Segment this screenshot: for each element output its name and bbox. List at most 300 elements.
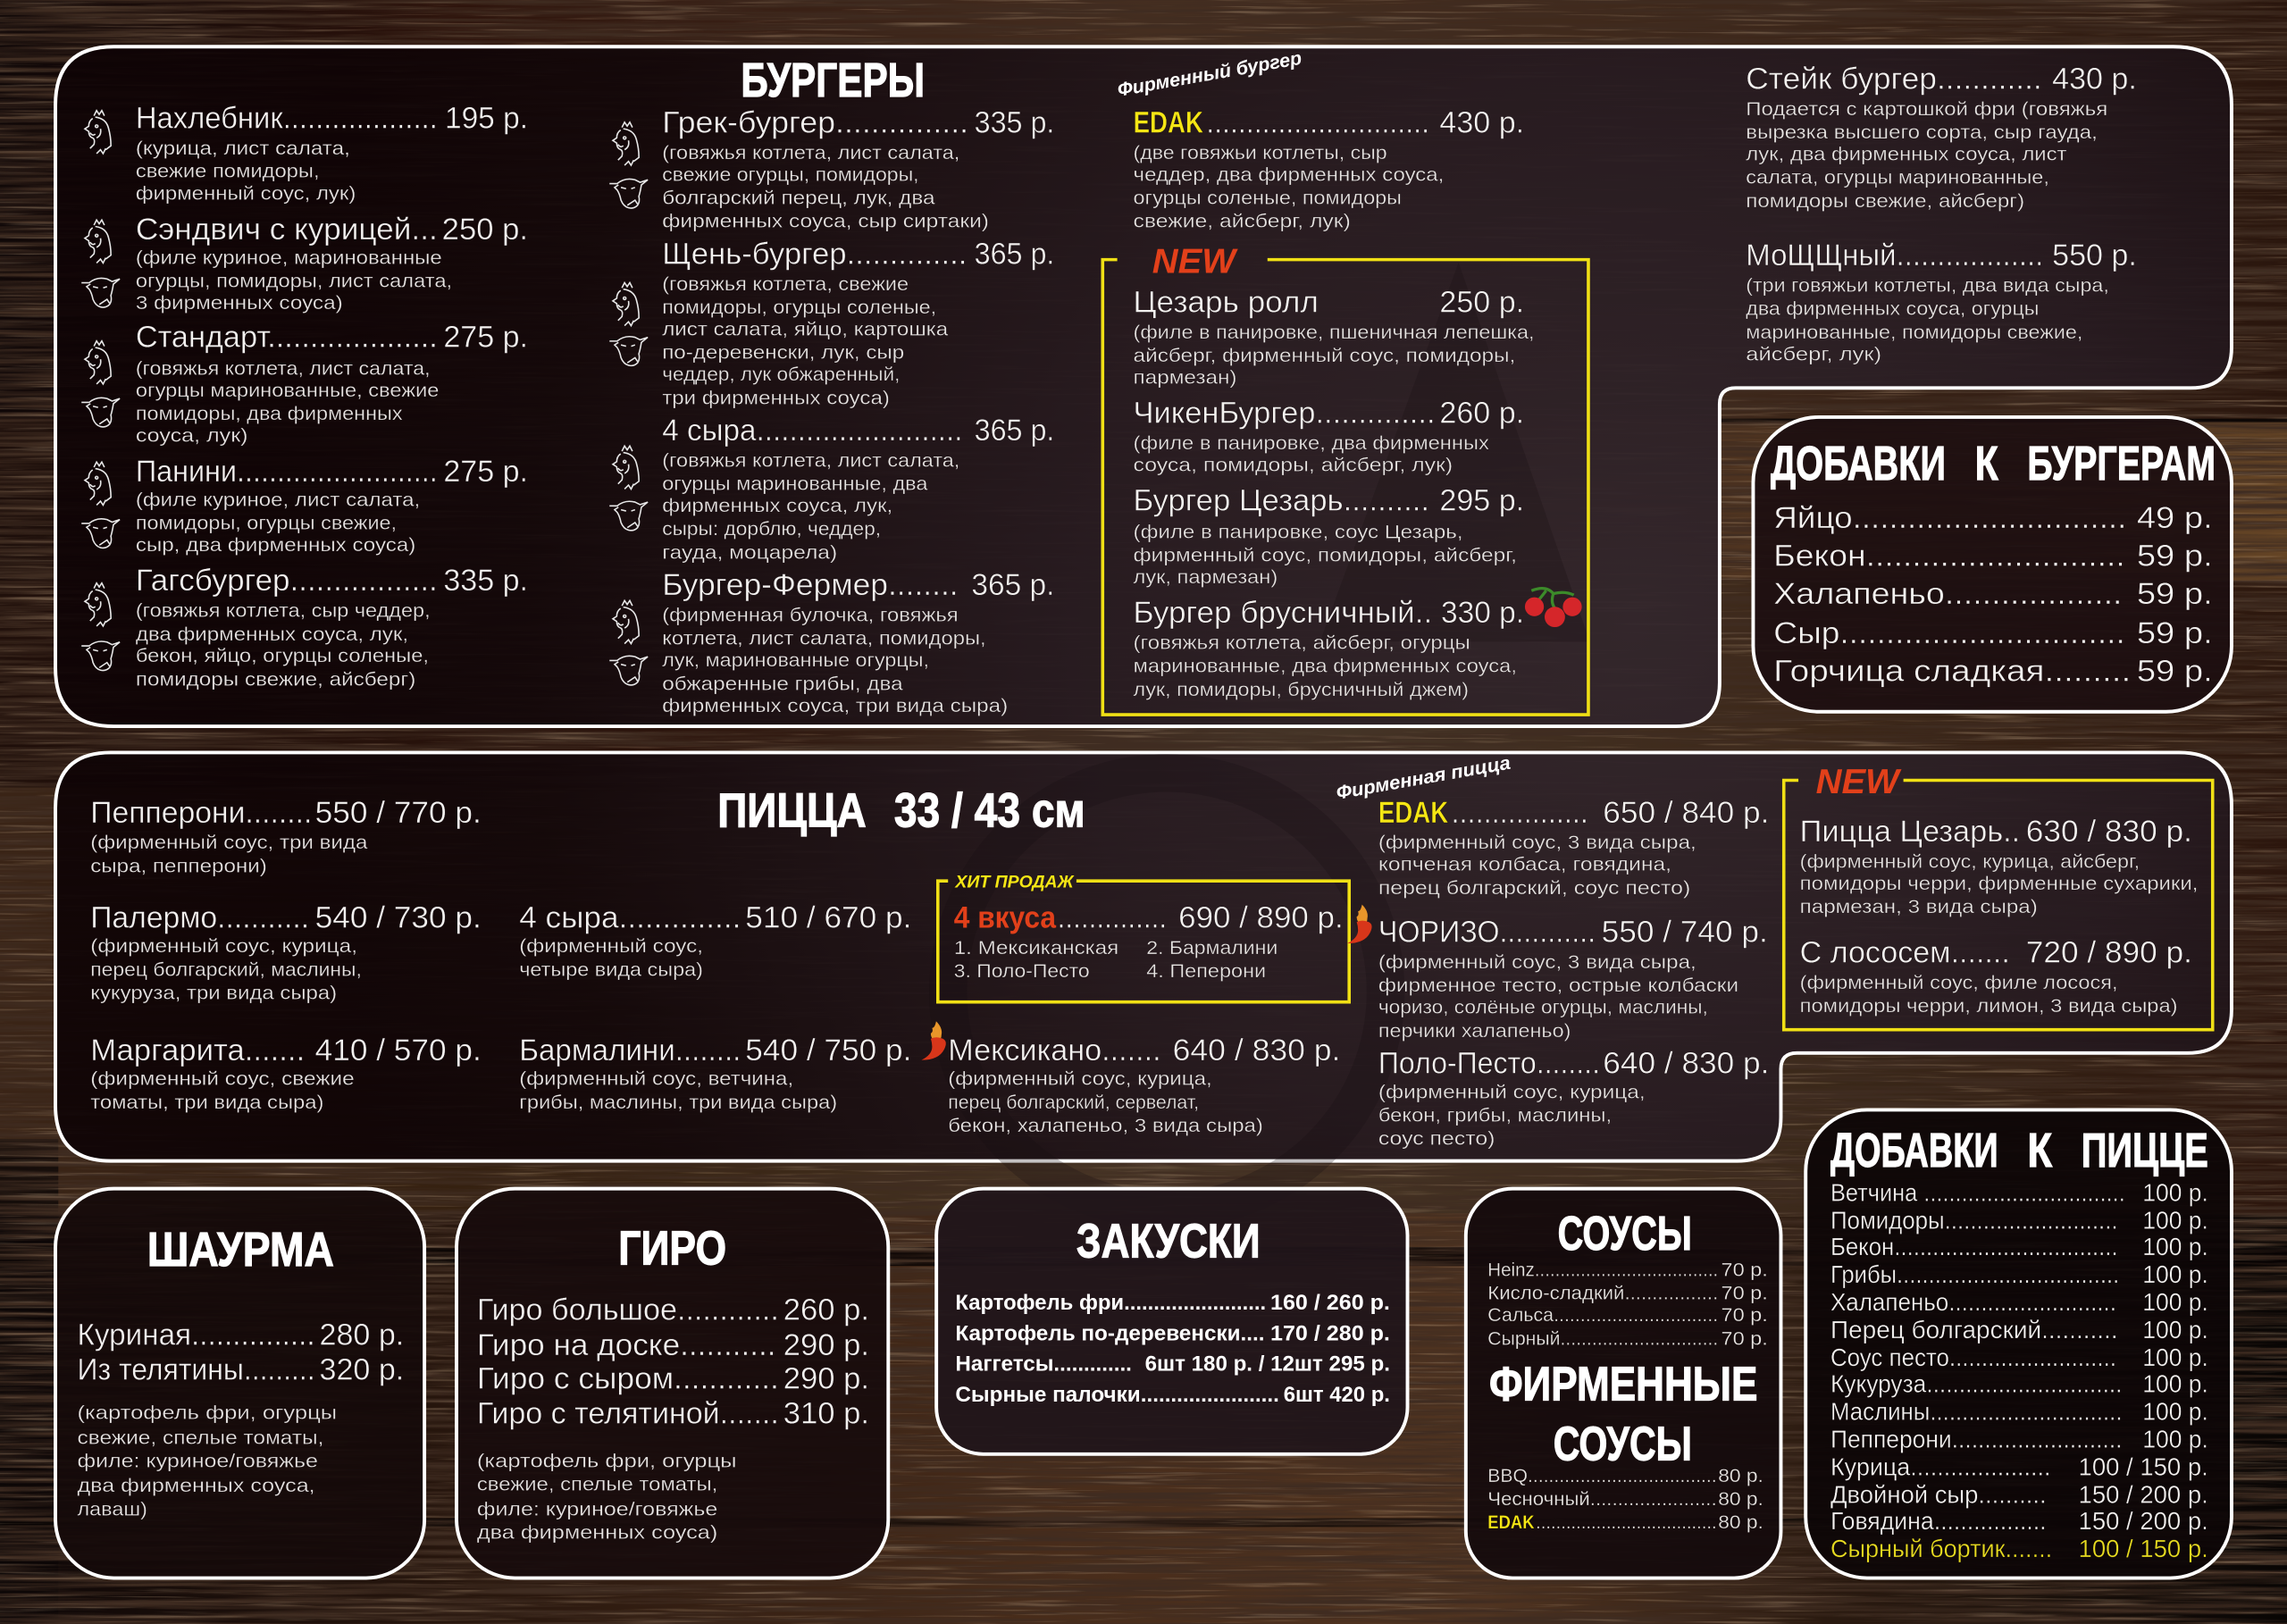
panel: burger add-ons <box>1753 417 2232 712</box>
burger: Стандарт: огурцы маринованные, свежие <box>136 381 439 401</box>
burger: EDAK: EDAK <box>1134 106 1203 140</box>
burger: Бургер брусничный: лук, помидоры, брусничный джем) <box>1134 680 1469 700</box>
add-on rows: 100 р. <box>2142 1179 2208 1207</box>
pizza: Палермо: кукуруза, три вида сыра) <box>90 983 337 1003</box>
pizza: Пепперони: (фирменный соус, три вида <box>90 833 368 853</box>
badge: NEW: NEW <box>1816 763 1902 801</box>
shawarma rows: Куриная............... <box>78 1318 315 1352</box>
pizza: Маргарита: Маргарита....... <box>90 1034 305 1067</box>
gyro rows: 290 р. <box>783 1328 869 1362</box>
shawarma description: два фирменных соуса, <box>78 1476 315 1496</box>
add-on rows: 100 р. <box>2142 1397 2208 1425</box>
sauce rows: Сальса............................... <box>1487 1305 1718 1326</box>
gyro rows <box>477 1293 869 1430</box>
pizza: Маргарита: 410 / 570 р. <box>315 1034 482 1067</box>
add-on rows: Яйцо.............................. <box>1773 501 2126 535</box>
shawarma rows: 320 р. <box>320 1353 404 1387</box>
pizza: ЧОРИЗО: перчики халапеньо) <box>1378 1021 1571 1042</box>
pizza: ЧОРИЗО: чоризо, солёные огурцы, маслины, <box>1378 998 1708 1018</box>
pizza: Пепперони: сыра, пепперони) <box>90 856 267 876</box>
burger: Цезарь ролл: 250 р. <box>1439 285 1524 319</box>
pizza: Маргарита: томаты, три вида сыра) <box>90 1092 323 1113</box>
burger: Щень-бургер: чеддер, лук обжаренный, <box>662 364 900 385</box>
pizza: 4 сыра: 4 сыра.............. <box>519 900 741 934</box>
burger: Панини <box>81 455 528 556</box>
burger: Стандарт: Стандарт.................... <box>136 321 438 355</box>
pizza: EDAK: копченая колбаса, говядина, <box>1378 855 1671 875</box>
burger: Стандарт <box>81 321 528 447</box>
burger: EDAK: огурцы соленые, помидоры <box>1134 188 1402 209</box>
gyro rows: Гиро на доске........... <box>477 1328 776 1362</box>
pizza: ЧОРИЗО <box>1378 916 1768 1042</box>
sauce rows: Heinz.................................... <box>1487 1260 1718 1281</box>
burger: Бургер-Фермер: фирменных соуса, три вида сыра) <box>662 696 1008 716</box>
burger: Грек-бургер: Грек-бургер............... <box>662 106 968 140</box>
burger: Стейк бургер: лук, два фирменных соуса, лист <box>1746 145 2067 165</box>
burger: Нахлебник: фирменный соус, лук) <box>136 184 356 205</box>
pizza: ЧОРИЗО: фирменное тесто, острые колбаски <box>1378 975 1738 996</box>
add-on rows: 100 р. <box>2142 1207 2208 1235</box>
burger: 4 сыра: сыры: дорблю, чеддер, <box>662 519 881 540</box>
burger: Грек-бургер: (говяжья котлета, лист салата, <box>662 143 959 163</box>
pizza: Маргарита: (фирменный соус, свежие <box>90 1069 355 1090</box>
add-on rows: 100 р. <box>2142 1316 2208 1344</box>
heading: pizza <box>717 784 1085 838</box>
signature sauce rows: .................................... <box>1536 1512 1717 1533</box>
add-on rows: 150 / 200 р. <box>2079 1507 2208 1535</box>
heading: pizza add-ons: К <box>2027 1124 2052 1177</box>
burger: МоЩЩный: айсберг, лук) <box>1746 344 1881 364</box>
burger: Сэндвич с курицей: 3 фирменных соуса) <box>136 293 343 314</box>
pizza: Пепперони: 550 / 770 р. <box>315 796 482 830</box>
burger: Стейк бургер: вырезка высшего сорта, сыр гауда, <box>1746 122 2098 143</box>
gyro description: два фирменных соуса) <box>477 1522 717 1543</box>
burger: EDAK: свежие, айсберг, лук) <box>1134 212 1351 232</box>
shawarma description <box>78 1403 337 1519</box>
burger: 4 сыра: 365 р. <box>975 414 1054 448</box>
burger: Бургер-Фермер: котлета, лист салата, помидоры, <box>662 629 986 649</box>
burger: ЧикенБургер: 260 р. <box>1439 396 1524 430</box>
panel: snacks <box>936 1189 1408 1454</box>
pizza: С лососем: 720 / 890 р. <box>2026 936 2192 970</box>
snack rows: Картофель по-деревенски.... <box>955 1321 1265 1345</box>
label: best seller: ХИТ ПРОДАЖ <box>954 872 1075 892</box>
pizza: Мексикано: 640 / 830 р. <box>1173 1034 1340 1067</box>
burger: Стейк бургер: Подается с картошкой фри (говяжья <box>1746 99 2107 120</box>
snack rows: Наггетсы............. <box>955 1352 1132 1377</box>
pizza: Мексикано: Мексикано....... <box>948 1034 1161 1067</box>
panel: gyro <box>457 1189 888 1578</box>
snack rows: 170 / 280 р. <box>1270 1321 1390 1345</box>
burger: Гагсбургер: (говяжья котлета, сыр чеддер, <box>136 601 431 622</box>
add-on rows <box>1773 501 2213 688</box>
burger: Панини: сыр, два фирменных соуса) <box>136 535 415 556</box>
pizza: 4 сыра <box>519 900 911 980</box>
add-on rows: Пепперони.......................... <box>1830 1425 2123 1452</box>
add-on rows: Говядина................. <box>1830 1507 2047 1535</box>
new items box <box>1102 242 1588 715</box>
signature sauce rows: Чесночный....................... <box>1487 1489 1717 1510</box>
burger: Стандарт: помидоры, два фирменных <box>136 404 403 424</box>
signature sauce rows <box>1487 1466 1763 1533</box>
pizza: Мексикано <box>948 1034 1340 1136</box>
burger: Бургер-Фермер: (фирменная булочка, говяжья <box>662 606 959 626</box>
add-on rows <box>1830 1179 2208 1562</box>
burger: Стандарт: соуса, лук) <box>136 426 248 447</box>
burger: ЧикенБургер: (филе в панировке, два фирменных <box>1134 433 1489 454</box>
pizza: Мексикано: (фирменный соус, курица, <box>948 1069 1212 1090</box>
burger: Гагсбургер: помидоры свежие, айсберг) <box>136 669 415 690</box>
burger: EDAK: 430 р. <box>1439 106 1524 140</box>
burger: Гагсбургер: два фирменных соуса, лук, <box>136 624 408 645</box>
add-on rows: Курица..................... <box>1830 1452 2051 1480</box>
sauce rows: Сырный.............................. <box>1487 1328 1718 1349</box>
label: signature pizza: Фирменная пицца <box>1335 753 1512 804</box>
burger: Стейк бургер <box>1746 63 2137 212</box>
panel: shawarma <box>55 1189 424 1578</box>
pizza: 4 вкуса: 1. Мексиканская <box>954 938 1118 958</box>
add-on rows: 100 / 150 р. <box>2079 1535 2208 1562</box>
burger: МоЩЩный: (три говяжьи котлеты, два вида сыра, <box>1746 276 2109 297</box>
add-on rows: 100 р. <box>2142 1233 2208 1260</box>
add-on rows: 100 р. <box>2142 1288 2208 1316</box>
snack rows: 160 / 260 р. <box>1270 1291 1390 1315</box>
burger: 4 сыра <box>609 414 1054 563</box>
pizza: 4 вкуса: 690 / 890 р. <box>1178 900 1344 934</box>
add-on rows: 150 / 200 р. <box>2079 1480 2208 1508</box>
gyro description: филе: куриное/говяжье <box>477 1499 717 1519</box>
burger: МоЩЩный <box>1746 239 2137 364</box>
pizza: С лососем: (фирменный соус, филе лосося, <box>1800 973 2118 993</box>
burger: Щень-бургер <box>609 238 1054 408</box>
burger: Нахлебник <box>85 102 528 205</box>
pizza: Поло-Песто <box>1378 1047 1769 1150</box>
heading: pizza: ПИЦЦА <box>717 784 867 838</box>
burger: 4 сыра: огурцы маринованные, два <box>662 474 928 495</box>
burger: Бургер-Фермер: лук, маринованные огурцы, <box>662 650 929 671</box>
burger: МоЩЩный: МоЩЩный.................. <box>1746 239 2043 272</box>
shawarma description: (картофель фри, огурцы <box>78 1403 337 1424</box>
signature sauce rows: EDAK <box>1487 1512 1535 1533</box>
pizza: 4 вкуса: .............. <box>1058 900 1167 934</box>
burger: Сэндвич с курицей: Сэндвич с курицей... <box>136 213 438 247</box>
burger: Грек-бургер: болгарский перец, лук, два <box>662 188 935 209</box>
gyro rows: 260 р. <box>783 1293 869 1327</box>
add-on rows: 100 / 150 р. <box>2079 1452 2208 1480</box>
burger: 4 сыра: (говяжья котлета, лист салата, <box>662 450 959 471</box>
burger: Сэндвич с курицей: 250 р. <box>442 213 528 247</box>
pizza: 4 сыра: (фирменный соус, <box>519 936 703 957</box>
burger: 4 сыра: фирменных соуса, лук, <box>662 496 892 516</box>
burger: EDAK: чеддер, два фирменных соуса, <box>1134 164 1444 185</box>
burger: Стейк бургер: помидоры свежие, айсберг) <box>1746 191 2024 212</box>
add-on rows: Халапеньо................... <box>1773 577 2123 611</box>
burger: Бургер Цезарь: фирменный соус, помидоры, айсберг, <box>1134 546 1517 566</box>
watermark ring <box>948 773 1386 1210</box>
burger: Бургер брусничный <box>1134 596 1524 700</box>
burger: Панини: Панини......................... <box>136 455 438 489</box>
burger: Бургер-Фермер: Бургер-Фермер........ <box>662 568 959 602</box>
add-on rows: Бекон............................ <box>1773 539 2125 573</box>
pizza: Палермо: перец болгарский, маслины, <box>90 959 362 980</box>
sauce rows: 70 р. <box>1722 1260 1768 1281</box>
add-on rows: Грибы................................... <box>1830 1260 2119 1288</box>
pizza: Палермо: (фирменный соус, курица, <box>90 936 357 957</box>
add-on rows: Кукуруза.............................. <box>1830 1369 2123 1397</box>
pizza: EDAK: (фирменный соус, 3 вида сыра, <box>1378 833 1696 853</box>
heading: pizza add-ons: ПИЦЦЕ <box>2082 1124 2208 1177</box>
add-on rows: Халапеньо.......................... <box>1830 1288 2116 1316</box>
burger: Бургер Цезарь <box>1134 483 1524 588</box>
icon: berries <box>1525 589 1582 627</box>
burger: Бургер брусничный: (говяжья котлета, айсберг, огурцы <box>1134 633 1470 654</box>
panel: pizza add-ons <box>1805 1109 2232 1578</box>
pizza: EDAK <box>1378 796 1769 899</box>
pizza: 4 вкуса: 4. Пеперони <box>1146 961 1266 982</box>
burger: Стандарт: 275 р. <box>443 321 528 355</box>
burger: EDAK <box>1134 106 1524 232</box>
pizza: Пицца Цезарь <box>1800 815 2198 917</box>
pizza: 4 вкуса: 2. Бармалини <box>1146 938 1278 958</box>
burger: Бургер брусничный: 330 р. <box>1441 596 1524 630</box>
heading: gyro: ГИРО <box>618 1222 726 1276</box>
snack rows: 6шт 180 р. / 12шт 295 р. <box>1145 1352 1390 1377</box>
icon: chili <box>921 1021 946 1060</box>
pizza: Пицца Цезарь: помидоры черри, фирменные сухарики, <box>1800 874 2198 894</box>
panel: pizza <box>55 752 2232 1210</box>
heading: pizza add-ons <box>1830 1124 2208 1177</box>
heading: burgers: БУРГЕРЫ <box>741 54 925 107</box>
add-on rows: 100 р. <box>2142 1425 2208 1452</box>
snack rows: Картофель фри........................ <box>955 1291 1266 1315</box>
burger: Щень-бургер: 365 р. <box>975 238 1054 272</box>
sauce rows: 70 р. <box>1722 1328 1768 1349</box>
heading: pizza add-ons: ДОБАВКИ <box>1830 1124 1998 1177</box>
pizza: EDAK: ................. <box>1451 796 1588 830</box>
burger: ЧикенБургер: ЧикенБургер.............. <box>1134 396 1436 430</box>
shawarma description: свежие, спелые томаты, <box>78 1427 323 1448</box>
burger: Панини: помидоры, огурцы свежие, <box>136 514 397 534</box>
pizza: Поло-Песто: соус песто) <box>1378 1129 1495 1150</box>
burger: EDAK: ............................ <box>1206 106 1429 140</box>
add-on rows: 59 р. <box>2137 539 2213 573</box>
best seller box <box>938 872 1349 1002</box>
burger: Бургер-Фермер: 365 р. <box>971 568 1054 602</box>
burger: Бургер-Фермер <box>609 568 1054 716</box>
pizza: 4 сыра: четыре вида сыра) <box>519 959 703 980</box>
pizza: EDAK: перец болгарский, соус песто) <box>1378 878 1690 899</box>
burger: Гагсбургер <box>81 564 528 690</box>
heading: signature sauces: СОУСЫ <box>1554 1417 1692 1470</box>
add-on rows: Перец болгарский........... <box>1830 1316 2118 1344</box>
pizza: С лососем: С лососем....... <box>1800 936 2010 970</box>
burger: Панини: 275 р. <box>443 455 528 489</box>
pizza: Пицца Цезарь: пармезан, 3 вида сыра) <box>1800 897 2038 917</box>
signature sauce rows: 80 р. <box>1718 1489 1763 1510</box>
signature sauce rows: 80 р. <box>1718 1512 1763 1533</box>
pizza: Бармалини: грибы, маслины, три вида сыра) <box>519 1092 837 1113</box>
burger: МоЩЩный: маринованные, помидоры свежие, <box>1746 322 2082 343</box>
burger: Щень-бургер: по-деревенски, лук, сыр <box>662 343 904 364</box>
pizza: 4 вкуса: 4 вкуса <box>954 900 1057 934</box>
pizza: С лососем <box>1800 936 2192 1017</box>
heading: burger add-ons: К <box>1975 437 1998 490</box>
burger: Нахлебник: свежие помидоры, <box>136 161 320 181</box>
new pizza box <box>1784 763 2213 1030</box>
burger: 4 сыра: гауда, моцарела) <box>662 542 837 563</box>
shawarma description: филе: куриное/говяжье <box>78 1451 318 1471</box>
add-on rows: 100 р. <box>2142 1369 2208 1397</box>
label: signature burger: Фирменный бургер <box>1116 48 1303 101</box>
burger: 4 сыра: 4 сыра......................... <box>662 414 963 448</box>
gyro rows: 290 р. <box>783 1361 869 1395</box>
burger: МоЩЩный: 550 р. <box>2052 239 2137 272</box>
burger: EDAK: (две говяжьи котлеты, сыр <box>1134 143 1387 163</box>
signature sauce rows: BBQ.................................... <box>1487 1466 1717 1486</box>
burger: Щень-бургер: помидоры, огурцы соленые, <box>662 297 936 318</box>
add-on rows: 59 р. <box>2137 616 2213 650</box>
pizza: Бармалини <box>519 1034 911 1113</box>
add-on rows: 100 р. <box>2142 1344 2208 1371</box>
panel: burgers <box>55 46 2232 726</box>
burger: Стейк бургер: Стейк бургер............ <box>1746 63 2042 96</box>
add-on rows: 59 р. <box>2137 577 2213 611</box>
pizza: ЧОРИЗО: ЧОРИЗО............ <box>1378 916 1596 950</box>
burger: ЧикенБургер: соуса, помидоры, айсберг, лук) <box>1134 455 1453 475</box>
add-on rows: Соус песто.......................... <box>1830 1344 2116 1371</box>
burger: Щень-бургер: три фирменных соуса) <box>662 388 890 408</box>
heading: signature sauces <box>1489 1357 1757 1470</box>
burger: Грек-бургер <box>609 106 1054 232</box>
add-on rows: Помидоры........................... <box>1830 1207 2118 1235</box>
burger: Стейк бургер: 430 р. <box>2052 63 2137 96</box>
heading: burger add-ons: ДОБАВКИ <box>1771 437 1946 490</box>
pizza: Поло-Песто: 640 / 830 р. <box>1603 1047 1769 1081</box>
burger: Гагсбургер: бекон, яйцо, огурцы соленые, <box>136 646 429 666</box>
add-on rows: Ветчина ................................ <box>1830 1179 2125 1207</box>
pizza: Мексикано: бекон, халапеньо, 3 вида сыра) <box>948 1116 1263 1136</box>
pizza: Маргарита <box>90 1034 482 1113</box>
shawarma description: лаваш) <box>78 1499 147 1519</box>
pizza: Поло-Песто: Поло-Песто........ <box>1378 1047 1600 1081</box>
burger: Гагсбургер: 335 р. <box>443 564 528 598</box>
pizza: 4 вкуса: 3. Поло-Песто <box>954 961 1090 982</box>
burger: Панини: (филе куриное, лист салата, <box>136 490 420 511</box>
burger: Грек-бургер: свежие огурцы, помидоры, <box>662 164 919 185</box>
burger: Бургер Цезарь: 295 р. <box>1439 483 1524 517</box>
burger: Сэндвич с курицей: огурцы, помидоры, лист салата, <box>136 272 452 292</box>
burger: Бургер Цезарь: Бургер Цезарь.......... <box>1134 483 1429 517</box>
pizza: Пицца Цезарь: (фирменный соус, курица, айсберг, <box>1800 851 2140 872</box>
gyro description: (картофель фри, огурцы <box>477 1451 736 1471</box>
pizza: ЧОРИЗО: (фирменный соус, 3 вида сыра, <box>1378 952 1696 973</box>
heading: sauces: СОУСЫ <box>1558 1207 1692 1260</box>
gyro rows: Гиро с телятиной....... <box>477 1396 779 1430</box>
burger: Сэндвич с курицей <box>81 213 528 314</box>
pizza: Палермо: Палермо........... <box>90 900 309 934</box>
gyro rows: 310 р. <box>783 1396 869 1430</box>
burger: Щень-бургер: Щень-бургер.............. <box>662 238 967 272</box>
heading: burger add-ons <box>1771 437 2216 490</box>
pizza: С лососем: помидоры черри, лимон, 3 вида сыра) <box>1800 996 2178 1017</box>
snack rows: 6шт 420 р. <box>1284 1383 1390 1407</box>
burger: Грек-бургер: фирменных соуса, сыр сиртаки) <box>662 212 989 232</box>
badge: NEW: NEW <box>1152 242 1238 280</box>
add-on rows: Маслины.............................. <box>1830 1397 2123 1425</box>
gyro rows: Гиро с сыром............ <box>477 1361 779 1395</box>
burger: МоЩЩный: два фирменных соуса, огурцы <box>1746 299 2039 320</box>
heading: burger add-ons: БУРГЕРАМ <box>2027 437 2216 490</box>
burger: Бургер Цезарь: лук, пармезан) <box>1134 567 1278 588</box>
burger: Нахлебник: Нахлебник................... <box>136 102 438 136</box>
burger: Гагсбургер: Гагсбургер................. <box>136 564 438 598</box>
pizza: 4 вкуса <box>954 900 1344 982</box>
snack rows <box>955 1291 1390 1407</box>
pizza: Палермо <box>90 900 482 1003</box>
sauce rows: 70 р. <box>1722 1284 1768 1304</box>
add-on rows: 59 р. <box>2137 654 2213 688</box>
add-on rows: Сыр............................... <box>1773 616 2125 650</box>
pizza: Мексикано: перец болгарский, сервелат, <box>948 1092 1199 1113</box>
burger: Цезарь ролл <box>1134 285 1535 388</box>
heading: snacks: ЗАКУСКИ <box>1076 1214 1261 1268</box>
sauce rows <box>1487 1260 1768 1349</box>
burger: Стейк бургер: салата, огурцы маринованные, <box>1746 168 2049 188</box>
pizza: Пицца Цезарь: 630 / 830 р. <box>2026 815 2192 849</box>
pizza: Поло-Песто: бекон, грибы, маслины, <box>1378 1106 1612 1126</box>
signature sauce rows: 80 р. <box>1718 1466 1763 1486</box>
pizza: EDAK: EDAK <box>1378 796 1448 830</box>
pizza: EDAK: 650 / 840 р. <box>1603 796 1769 830</box>
burger: Сэндвич с курицей: (филе куриное, маринованные <box>136 248 442 269</box>
add-on rows: Горчица сладкая......... <box>1773 654 2131 688</box>
gyro description <box>477 1451 736 1543</box>
heading: pizza: 33 / 43 см <box>894 784 1085 838</box>
add-on rows: Бекон................................... <box>1830 1233 2118 1260</box>
burger: Грек-бургер: 335 р. <box>975 106 1054 140</box>
pizza: ЧОРИЗО: 550 / 740 р. <box>1602 916 1768 950</box>
add-on rows: Сырный бортик....... <box>1830 1535 2052 1562</box>
heading: signature sauces: ФИРМЕННЫЕ <box>1489 1357 1757 1411</box>
pizza: Поло-Песто: (фирменный соус, курица, <box>1378 1082 1646 1102</box>
panel: sauces <box>1466 1189 1780 1578</box>
burger: Нахлебник: 195 р. <box>445 102 528 136</box>
sauce rows: Кисло-сладкий................. <box>1487 1284 1718 1304</box>
burger: Бургер брусничный: Бургер брусничный.. <box>1134 596 1432 630</box>
icon: chili <box>1347 905 1372 943</box>
pizza: Пепперони: Пепперони........ <box>90 796 312 830</box>
pizza: Бармалини: (фирменный соус, ветчина, <box>519 1069 793 1090</box>
shawarma rows <box>78 1318 404 1387</box>
gyro description: свежие, спелые томаты, <box>477 1475 717 1495</box>
burger: Щень-бургер: лист салата, яйцо, картошка <box>662 320 948 340</box>
heading: shawarma: ШАУРМА <box>147 1223 334 1277</box>
burger: Стандарт: (говяжья котлета, лист салата, <box>136 359 431 380</box>
burger: Бургер брусничный: маринованные, два фирменных соуса, <box>1134 657 1517 677</box>
burger: Бургер Цезарь: (филе в панировке, соус Цезарь, <box>1134 522 1463 542</box>
watermark logo <box>1320 263 1590 641</box>
burger: ЧикенБургер <box>1134 396 1524 475</box>
burger: Цезарь ролл: (филе в панировке, пшеничная лепешка, <box>1134 322 1535 343</box>
add-on rows: 100 р. <box>2142 1260 2208 1288</box>
pizza: Пепперони <box>90 796 482 876</box>
burger: Цезарь ролл: айсберг, фирменный соус, помидоры, <box>1134 346 1515 366</box>
add-on rows: 49 р. <box>2137 501 2213 535</box>
burger: Щень-бургер: (говяжья котлета, свежие <box>662 274 909 295</box>
shawarma rows: Из телятины......... <box>78 1353 315 1387</box>
pizza: Пицца Цезарь: Пицца Цезарь.. <box>1800 815 2020 849</box>
shawarma rows: 280 р. <box>320 1318 404 1352</box>
